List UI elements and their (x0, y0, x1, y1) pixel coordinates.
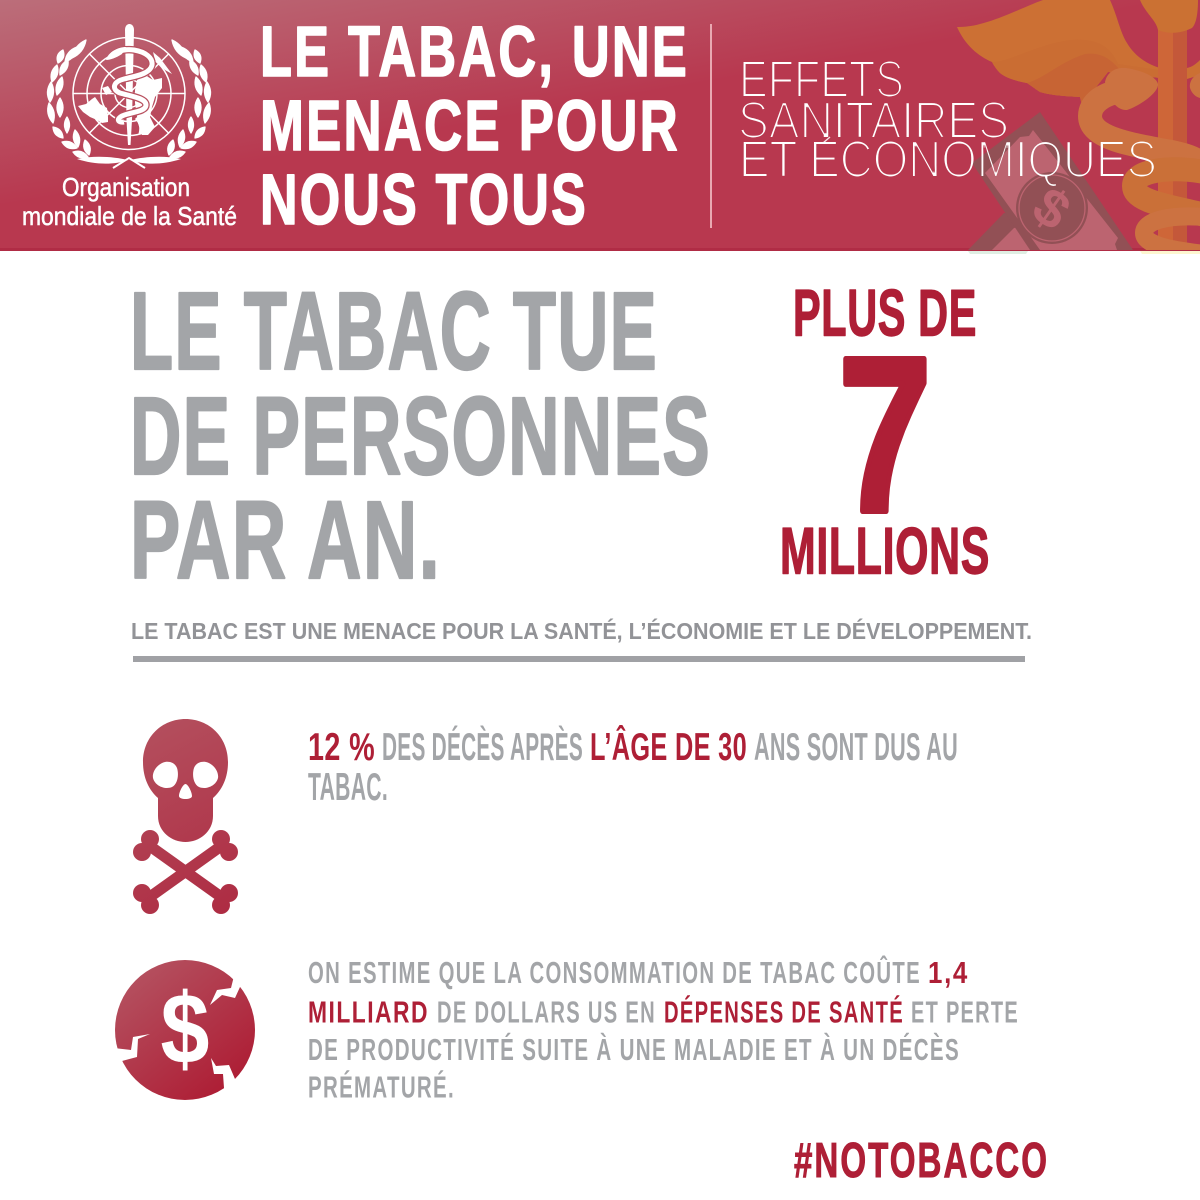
banner title (260, 13, 689, 240)
statistic: 12 % (308, 725, 958, 809)
crack: left (105, 1034, 150, 1065)
emblem: continents (78, 52, 172, 135)
crack: upper right (210, 970, 262, 1005)
hashtag: #NOTOBACCO (794, 1134, 1049, 1188)
statistic: 12 %: 12 % (308, 726, 375, 769)
organisation name (22, 172, 237, 231)
header banner (0, 0, 1200, 254)
organisation name: mondiale de la Santé (22, 201, 237, 231)
statistic: cost: 1,4 (928, 955, 969, 990)
banner subtitle (738, 51, 1157, 189)
header background (0, 0, 1200, 250)
illustration: banknotes (968, 112, 1133, 250)
banner divider (710, 24, 712, 228)
statistic: 12 %: TABAC. (308, 766, 388, 809)
key figure: 7 millions: MILLIONS (780, 514, 990, 588)
main statement: PAR AN. (130, 479, 441, 602)
statistic: cost: ET PERTE (911, 994, 1019, 1030)
statistic: 12 %: L’ÂGE DE 30 (590, 725, 747, 769)
main statement (130, 270, 711, 602)
emblem: wreath right (168, 40, 211, 158)
faint illustration remnants under banner (968, 251, 1200, 254)
statistic: 12 %: DES DÉCÈS APRÈS (382, 725, 583, 769)
emblem: staff (125, 24, 134, 145)
statistic: cost (308, 954, 1019, 1104)
subheading: LE TABAC EST UNE MENACE POUR LA SANTÉ, L’ÉCONOMIE ET LE DÉVELOPPEMENT. (131, 617, 1032, 644)
key figure: 7 millions: PLUS DE (793, 276, 977, 350)
emblem: globe grid (73, 38, 185, 150)
key figure: 7 millions: 7 (838, 311, 932, 558)
statistic: cost: DE DOLLARS US EN (437, 994, 656, 1030)
statistic: cost: PRÉMATURÉ. (308, 1070, 455, 1104)
banner title: NOUS TOUS (260, 161, 588, 240)
dollar sign: $ (161, 973, 209, 1084)
banner subtitle: EFFETS (739, 51, 904, 109)
crack: lower right (211, 1058, 258, 1100)
key figure: 7 millions (780, 276, 990, 588)
statistic: cost: DÉPENSES DE SANTÉ (664, 994, 904, 1030)
banner title: LE TABAC, UNE (260, 13, 689, 92)
main statement: DE PERSONNES (130, 375, 711, 498)
icon: cracked dollar coin (105, 960, 262, 1100)
icon: skull and crossbones (133, 719, 238, 914)
subheading rule (133, 656, 1025, 662)
WHO emblem (47, 24, 211, 168)
emblem: wreath left (47, 40, 90, 158)
header bottom edge (0, 248, 1200, 251)
statistic: cost: MILLIARD (308, 994, 429, 1030)
main statement: LE TABAC TUE (130, 270, 658, 393)
illustration: caduceus (957, 0, 1200, 254)
emblem: serpent (106, 47, 152, 134)
banner title: MENACE POUR (260, 87, 680, 166)
illustration: banknotes: $ (1022, 176, 1081, 242)
organisation name: Organisation (62, 172, 190, 202)
statistic: 12 %: ANS SONT DUS AU (754, 726, 958, 769)
banner subtitle: SANITAIRES (738, 92, 1009, 150)
emblem: ribbon (77, 157, 181, 168)
